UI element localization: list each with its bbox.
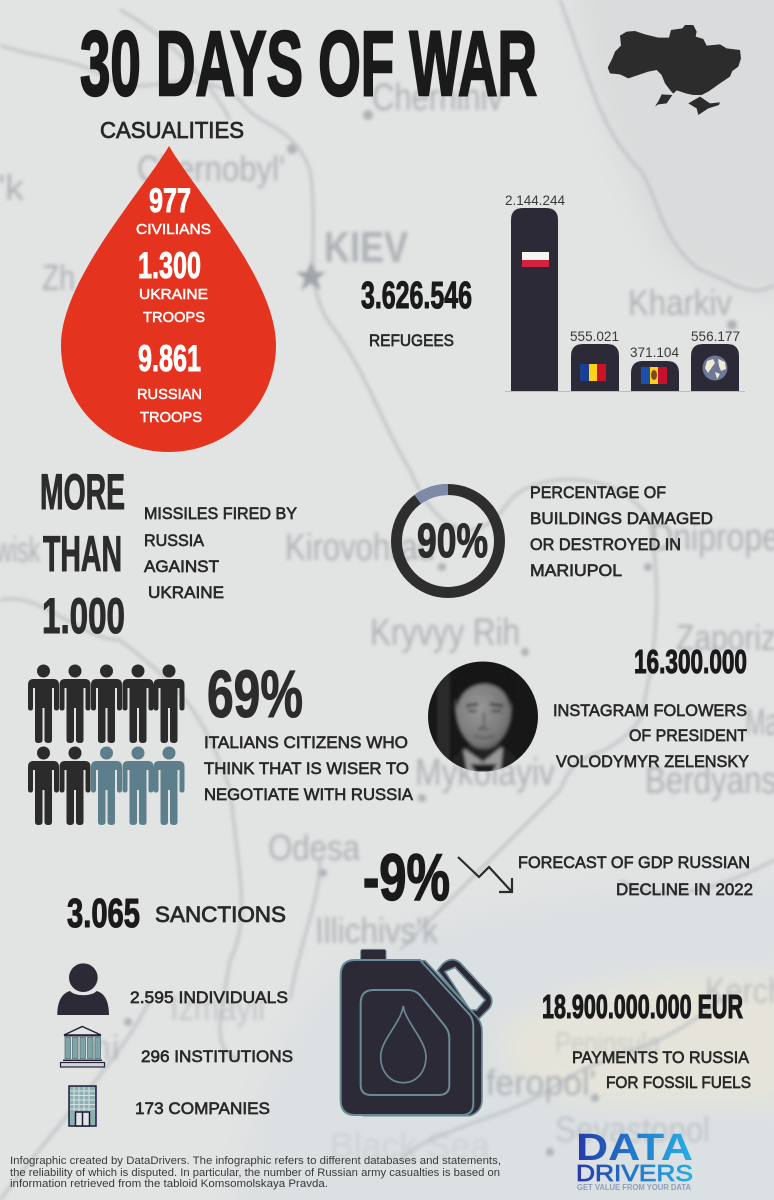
background map: Odesa: [268, 827, 361, 868]
buildings description: PERCENTAGE OF: [530, 483, 666, 502]
civilians stat: 977: [149, 182, 191, 220]
donut chart 90%: 90%: [417, 515, 488, 568]
payments description: [572, 1048, 751, 1092]
background map: Kharkiv: [628, 282, 732, 323]
Russian troops stat: [137, 338, 202, 426]
background map: Black Sea: [330, 1125, 491, 1166]
icon: map of Ukraine: [608, 25, 741, 115]
followers description: OF PRESIDENT: [629, 726, 747, 745]
GDP description: DECLINE IN 2022: [616, 880, 753, 899]
payments description: PAYMENTS TO RUSSIA: [572, 1048, 750, 1067]
sanctions total: 3.065: [67, 890, 140, 936]
Russian troops stat: TROOPS: [140, 409, 202, 426]
background map: feropol': [486, 1062, 596, 1103]
buildings description: [530, 483, 713, 580]
individuals label: 2.595 INDIVIDUALS: [130, 988, 288, 1007]
civilians stat: CIVILIANS: [136, 221, 211, 238]
missiles description: RUSSIA: [144, 531, 205, 550]
buildings description: MARIUPOL: [530, 561, 622, 580]
panel: fossil fuels: [341, 949, 751, 1116]
civilians stat: [136, 182, 211, 238]
panel: casualties: [61, 117, 276, 452]
pictogram: ten people: [28, 664, 184, 825]
buildings description: OR DESTROYED IN: [530, 535, 681, 554]
buildings description: BUILDINGS DAMAGED: [530, 509, 713, 528]
opinion description: ITALIANS CITIZENS WHO: [204, 733, 408, 752]
footer note: the reliability of which is disputed. In particular, the number of Russian army casualties is based on: [10, 1167, 500, 1179]
donut chart 90%: [396, 490, 500, 592]
69%: 69%: [207, 657, 303, 732]
icon: institution: [60, 1026, 104, 1067]
panel: Zelensky Instagram: [428, 643, 749, 775]
portrait of Zelensky: [428, 661, 538, 775]
missiles description: MISSILES FIRED BY: [144, 504, 297, 523]
bar chart: 2.144.244: [505, 193, 565, 208]
logo: Data Drivers: GET VALUE FROM YOUR DATA: [577, 1183, 691, 1192]
opinion description: NEGOTIATE WITH RUSSIA: [204, 785, 414, 804]
refugees total: 3.626.546: [361, 275, 472, 317]
icon: Romania flag: [580, 364, 606, 381]
GDP description: FORECAST OF GDP RUSSIAN: [518, 853, 750, 872]
payments description: FOR FOSSIL FUELS: [606, 1073, 751, 1092]
footer note: Infographic created by DataDrivers. The infographic refers to different databases and statements,: [10, 1155, 501, 1167]
bar chart: [505, 193, 745, 392]
panel: GDP forecast: [363, 840, 753, 914]
more than 1.000: 1.000: [42, 588, 125, 644]
Russian troops stat: 9.861: [138, 338, 201, 379]
followers description: VOLODYMYR ZELENSKY: [556, 752, 749, 771]
logo: Data Drivers: DRIVERS: [576, 1160, 693, 1186]
arrow: falling trend: [458, 857, 512, 892]
panel: Italian opinion: [28, 657, 414, 825]
background map: Kirovohrad: [285, 527, 435, 569]
background map: Kryvyy Rih: [370, 612, 520, 654]
icon: office building: [69, 1086, 96, 1126]
followers description: INSTAGRAM FOLOWERS: [553, 701, 747, 720]
logo: Data Drivers: DATA: [576, 1127, 693, 1169]
panel: missiles: [40, 464, 297, 644]
panel: refugees: [361, 193, 745, 392]
followers description: [553, 701, 749, 771]
missiles description: AGAINST: [144, 557, 219, 576]
bar chart: 371.104: [630, 345, 679, 360]
more than 1.000: [40, 464, 125, 644]
icon: Moldova flag: [641, 367, 667, 384]
refugees label: REFUGEES: [369, 331, 454, 350]
background map: Peninsula: [555, 1027, 660, 1060]
background map: Mykolayiv: [415, 752, 555, 794]
sanctions label: SANCTIONS: [155, 902, 286, 927]
icon: Poland flag: [522, 252, 549, 267]
blood drop: [61, 146, 276, 452]
Ukraine troops stat: [138, 245, 208, 326]
panel: Mariupol buildings: [396, 483, 713, 592]
Russian troops stat: RUSSIAN: [137, 386, 202, 403]
icon: person: [57, 963, 109, 1015]
panel: sanctions: [57, 890, 293, 1126]
background map: Chernobyl': [137, 148, 285, 189]
Ukraine troops stat: UKRAINE: [139, 286, 208, 303]
institutions label: 296 INSTITUTIONS: [141, 1047, 293, 1066]
Ukraine troops stat: 1.300: [138, 245, 201, 286]
GDP description: [518, 853, 753, 899]
-9%: -9%: [363, 840, 450, 914]
icon: globe: [702, 356, 728, 380]
background map: Chernihiv: [372, 77, 503, 119]
background map: KIEV: [324, 223, 409, 272]
missiles description: UKRAINE: [148, 583, 224, 602]
bar chart: 556.177: [691, 329, 740, 344]
icon: jerry can: [341, 949, 492, 1116]
opinion description: [204, 733, 414, 804]
background map: Zh: [42, 257, 75, 298]
opinion description: THINK THAT IS WISER TO: [204, 759, 409, 778]
more than 1.000: THAN: [43, 526, 122, 582]
companies label: 173 COMPANIES: [135, 1099, 270, 1118]
Ukraine troops stat: TROOPS: [143, 309, 205, 326]
casualties heading: CASUALITIES: [100, 117, 244, 143]
background map: Izmayil: [170, 987, 265, 1028]
missiles description: [144, 504, 297, 602]
footer note: [10, 1155, 501, 1190]
background map: ni: [90, 1027, 120, 1068]
background map: Sevastopol: [555, 1109, 710, 1150]
background map: Illichivs'k: [315, 910, 439, 951]
footer note: information retrieved from the tabloid Komsomolskaya Pravda.: [10, 1178, 328, 1190]
more than 1.000: MORE: [40, 464, 125, 520]
bar chart: 555.021: [570, 329, 619, 344]
logo: Data Drivers: [576, 1127, 693, 1192]
